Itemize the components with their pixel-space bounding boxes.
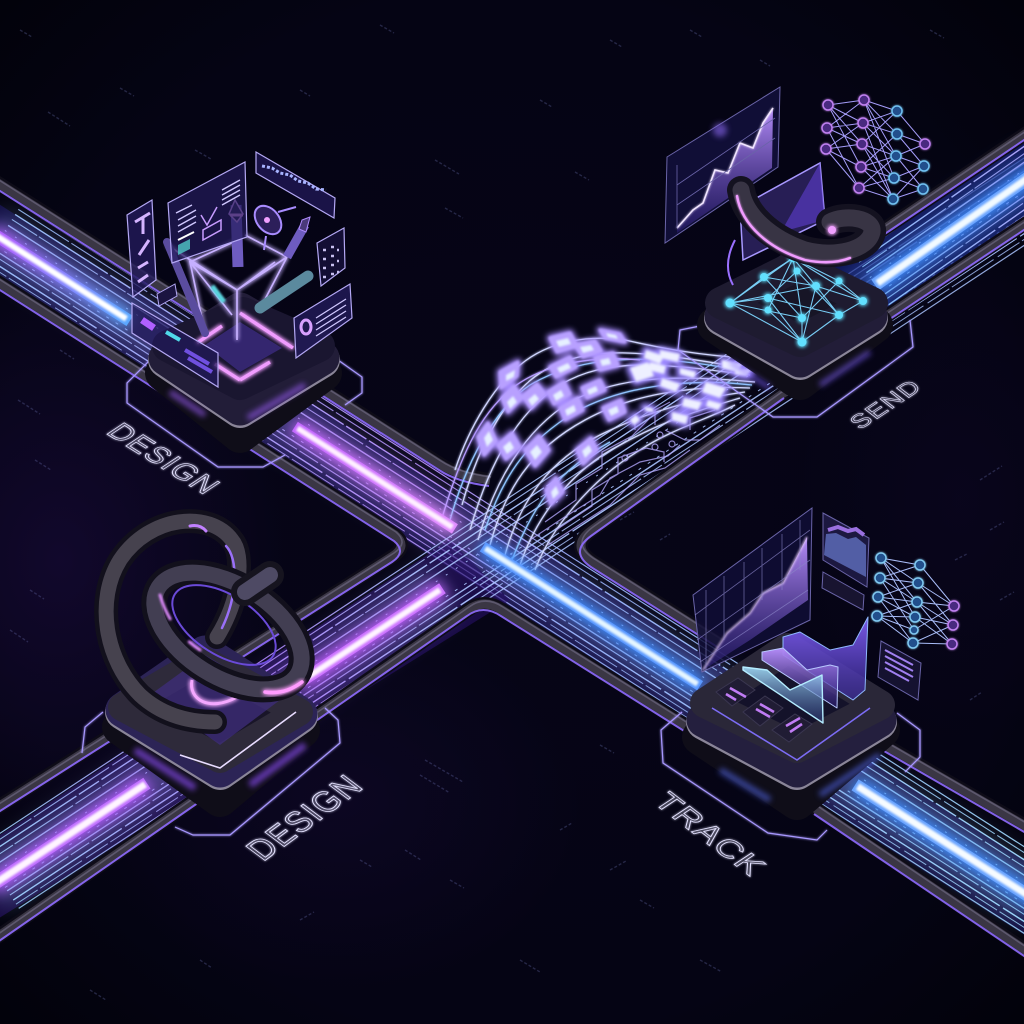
curved tube <box>737 190 872 262</box>
label: TRACK: TRACK <box>647 787 774 881</box>
mesh in floor square <box>205 322 282 372</box>
panel: layout <box>168 162 247 263</box>
platform <box>700 648 882 802</box>
label: DESIGN: DESIGN <box>238 768 371 866</box>
panel: waveform <box>256 152 335 218</box>
neural net on platform <box>730 258 863 342</box>
panel: line chart <box>665 87 780 243</box>
pen tool <box>229 200 243 267</box>
beam: main channel <box>0 224 1024 913</box>
label: SEND: SEND <box>844 376 928 433</box>
label: DESIGN: DESIGN <box>99 418 228 500</box>
platform <box>715 266 875 388</box>
outer ring <box>106 521 239 722</box>
knot rings <box>106 521 322 722</box>
conveyor: main diagonal data channel <box>0 192 1024 967</box>
neural network <box>872 553 959 649</box>
floor mesh with arc <box>150 655 296 768</box>
glass prism <box>728 163 825 285</box>
glowing beams <box>0 160 1024 913</box>
brush <box>287 217 310 257</box>
conveyor: lower-left data channel <box>0 132 1024 930</box>
circuit traces <box>530 402 720 545</box>
pencil <box>167 242 205 333</box>
panel: small charts <box>822 513 869 610</box>
label frame <box>82 708 340 835</box>
central fibre bundle with data packets <box>440 330 755 570</box>
tube <box>260 276 308 308</box>
panel: text list <box>878 641 921 700</box>
beam: upper-right channel <box>869 160 1024 293</box>
module: send (top-right) <box>665 87 930 433</box>
panel: growth chart <box>693 508 812 672</box>
data packets bodies <box>478 330 625 504</box>
sidebar tile <box>157 284 177 306</box>
data packets right cluster <box>630 350 751 425</box>
face glow <box>170 385 305 418</box>
hologram wireframe <box>167 235 287 340</box>
clasp <box>245 575 270 592</box>
label frame <box>678 320 913 417</box>
label frame <box>127 360 362 467</box>
panel: typography tools <box>127 200 156 297</box>
platform <box>163 310 324 435</box>
label frame <box>661 712 920 840</box>
panel: icon grid <box>317 228 345 286</box>
conveyor: upper-right data channel <box>820 0 1024 345</box>
neural network <box>821 95 930 204</box>
module: design (bottom-left) <box>82 521 371 866</box>
fibre lines <box>440 338 755 570</box>
data packets glow <box>478 330 625 504</box>
panel: text card <box>294 284 352 358</box>
module: design (top-left) <box>99 152 362 500</box>
magnifier <box>249 201 296 250</box>
neural nodes on platform <box>726 254 867 346</box>
data packets core <box>484 333 619 499</box>
beam: lower-left channel <box>0 580 448 894</box>
chart tiles <box>716 678 812 742</box>
platform <box>120 653 305 799</box>
panel: front screens <box>132 303 218 387</box>
module: track (bottom-right) <box>647 508 959 881</box>
inner ring <box>134 549 322 713</box>
area panels <box>743 617 868 723</box>
crystal <box>212 286 224 302</box>
glowing floor square <box>197 313 293 380</box>
